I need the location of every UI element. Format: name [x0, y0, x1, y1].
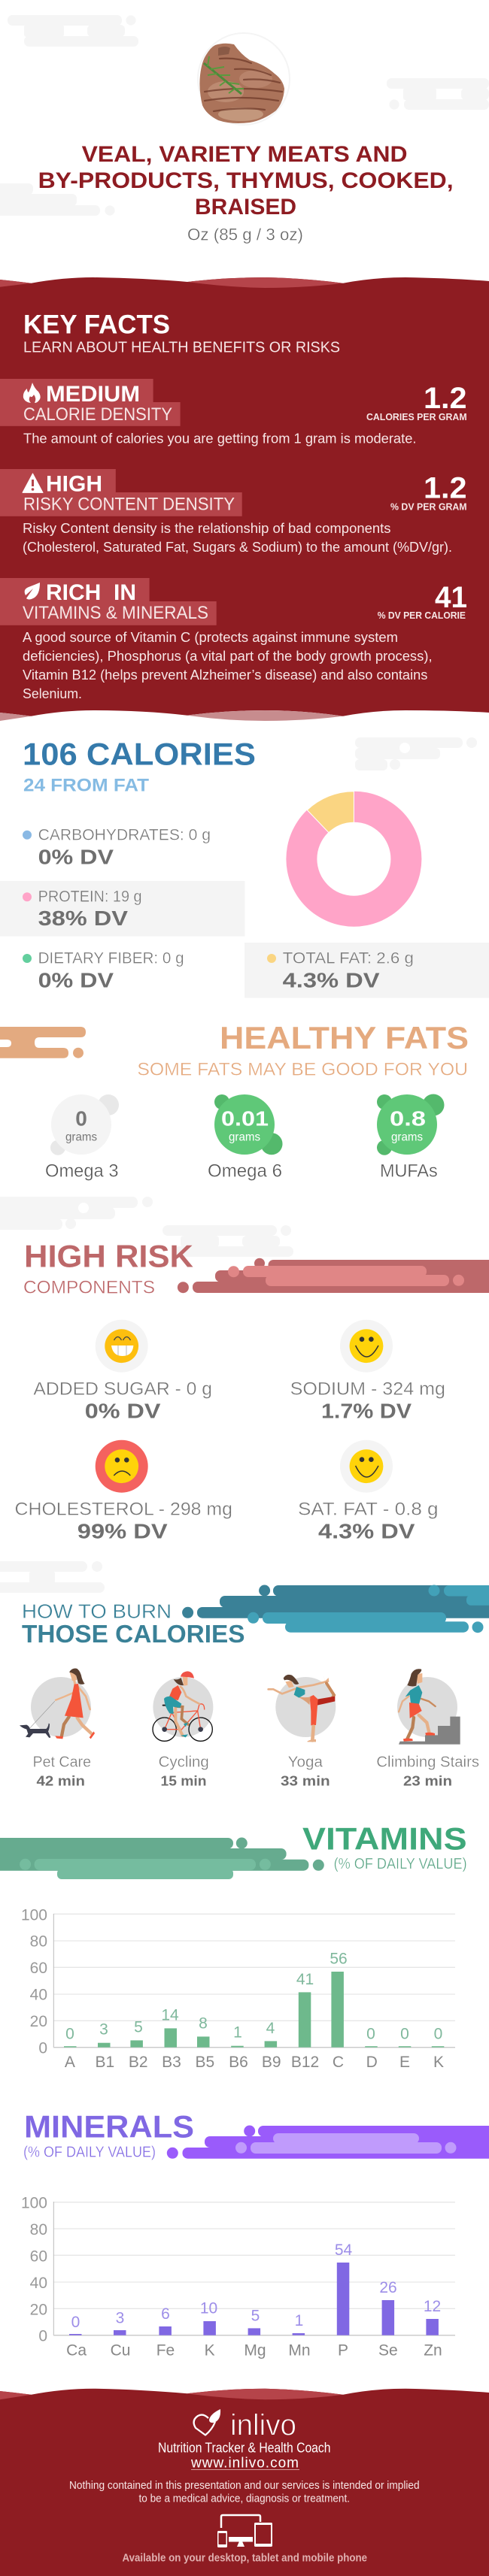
donut chart — [286, 792, 421, 927]
disclaimer: to be a medical advice, diagnosis or treatment. — [138, 2493, 350, 2505]
fact: rich in vitamins and minerals: Vitamin B12 (helps prevent Alzheimer’s disease) and also contains — [23, 667, 427, 683]
fact: risky content density: 1.2 — [424, 472, 467, 505]
fact: calorie density — [0, 379, 467, 446]
stat: omega 3: 0 — [75, 1107, 87, 1131]
bar chart: minerals: 80 — [30, 2221, 47, 2238]
stat: omega 6: 0.01 — [221, 1107, 269, 1131]
heading: high risk: HIGH RISK — [24, 1239, 193, 1274]
website link: www.inlivo.com — [190, 2455, 299, 2471]
bar chart: minerals: Mn — [288, 2342, 311, 2359]
icon: grilled meat photo in circle — [198, 33, 290, 125]
disclaimer — [69, 2480, 420, 2505]
bar chart: vitamins — [21, 1906, 455, 2071]
bar chart: vitamins: B1 — [95, 2054, 114, 2071]
availability note: Available on your desktop, tablet and mobile phone — [122, 2551, 367, 2564]
sub-heading: components: COMPONENTS — [23, 1278, 155, 1298]
bar chart: vitamins: B2 — [129, 2054, 148, 2071]
heading: key facts: KEY FACTS — [23, 310, 170, 340]
disclaimer: Nothing contained in this presentation and our services is intended or implied — [69, 2480, 420, 2492]
bar chart: vitamins: 0 — [65, 2026, 74, 2043]
bar chart: minerals: Fe — [156, 2342, 175, 2359]
activity labels: Cycling — [159, 1754, 209, 1771]
bar chart: vitamins: 100 — [21, 1906, 47, 1924]
bar chart: minerals: Zn — [424, 2342, 442, 2359]
bar chart: minerals: 12 — [424, 2298, 441, 2315]
risk: sodium — [290, 1320, 445, 1423]
title — [38, 142, 454, 219]
stat: MUFAs — [377, 1094, 444, 1182]
decorative header stripes — [0, 1837, 324, 1879]
decorative header stripes — [182, 1585, 489, 1633]
risk: cholesterol: CHOLESTEROL - 298 mg — [15, 1500, 232, 1520]
title: BY-PRODUCTS, THYMUS, COOKED, — [38, 168, 454, 193]
sub-heading: from fat: 24 FROM FAT — [23, 775, 149, 795]
stat: omega 3: Omega 3 — [45, 1161, 119, 1182]
legend: total fat: TOTAL FAT: 2.6 g — [283, 950, 414, 967]
legend: carbohydrates — [23, 826, 211, 868]
activity labels: Climbing Stairs — [376, 1754, 479, 1771]
bar chart: vitamins: C — [333, 2054, 344, 2071]
logo: inlivo: inlivo — [230, 2408, 296, 2441]
sub-heading: (% OF DAILY VALUE) — [334, 1856, 467, 1872]
bar chart: minerals: K — [205, 2342, 215, 2359]
panel: key facts — [0, 277, 489, 721]
risk: added sugar: 0% DV — [85, 1400, 161, 1423]
fact: risky content density: (Cholesterol, Saturated Fat, Sugars & Sodium) to the amount (%DV/gr). — [23, 540, 452, 555]
fact: calorie density: MEDIUM — [46, 382, 140, 407]
bar chart: vitamins: A — [65, 2054, 75, 2071]
fact: calorie density: CALORIE DENSITY — [23, 404, 172, 425]
serving size subtitle: Oz (85 g / 3 oz) — [187, 225, 303, 244]
title: VEAL, VARIETY MEATS AND — [82, 142, 408, 167]
bar chart: minerals: 60 — [30, 2248, 47, 2266]
heading: vitamins: VITAMINS — [302, 1821, 467, 1857]
bar chart: vitamins: B12 — [291, 2054, 319, 2071]
bar chart: minerals: 6 — [161, 2305, 170, 2323]
activity durations: 15 min — [161, 1774, 206, 1789]
bar chart: minerals: Cu — [111, 2342, 130, 2359]
bar chart: vitamins: 40 — [30, 1986, 47, 2004]
heading: how to burn: HOW TO BURN — [22, 1600, 172, 1622]
bar chart: minerals: 3 — [116, 2310, 124, 2327]
fact: rich in vitamins and minerals: VITAMINS & MINERALS — [23, 603, 208, 623]
bar chart: vitamins: 60 — [30, 1960, 47, 1977]
bar chart: vitamins: K — [433, 2054, 444, 2071]
activity: cycling — [153, 1671, 213, 1741]
bar chart: minerals: Ca — [66, 2342, 87, 2359]
bar chart: vitamins: 80 — [30, 1933, 47, 1951]
fact: risky content density: HIGH — [46, 472, 102, 497]
bar chart: vitamins: E — [399, 2054, 410, 2071]
activity durations: 23 min — [403, 1774, 452, 1789]
sub-heading: SOME FATS MAY BE GOOD FOR YOU — [137, 1060, 468, 1080]
legend: carbohydrates: 0% DV — [38, 845, 114, 868]
bar chart: minerals: 10 — [200, 2300, 217, 2317]
risk: saturated fat: SAT. FAT - 0.8 g — [298, 1500, 438, 1520]
legend: protein: 38% DV — [38, 907, 128, 930]
bar chart: minerals: 0 — [71, 2314, 80, 2331]
stat: MUFAs: MUFAs — [380, 1161, 438, 1182]
fact: risky content density: % DV PER GRAM — [390, 501, 467, 513]
bar chart: minerals: Mg — [244, 2342, 266, 2359]
heading: minerals: MINERALS — [24, 2108, 194, 2144]
heading: healthy fats: HEALTHY FATS — [220, 1020, 469, 1055]
risk: sodium: SODIUM - 324 mg — [290, 1379, 445, 1400]
activity durations: 33 min — [281, 1774, 330, 1789]
fact: calorie density: 1.2 — [424, 382, 467, 415]
activity durations — [36, 1774, 452, 1789]
sub-heading: (% OF DAILY VALUE) — [23, 2144, 156, 2160]
fact: risky content density: Risky Content density is the relationship of bad components — [23, 521, 391, 536]
bar chart: minerals — [21, 2195, 455, 2359]
risk: added sugar: ADDED SUGAR - 0 g — [33, 1379, 212, 1400]
fact: calorie density: CALORIES PER GRAM — [366, 411, 467, 422]
panel: vitamins — [0, 1821, 467, 2071]
bar chart: vitamins: B5 — [196, 2054, 214, 2071]
bar chart: vitamins: 1 — [233, 2024, 242, 2042]
panel: minerals — [21, 2108, 489, 2359]
stat: omega 3: grams — [65, 1131, 97, 1143]
risk: sodium: 1.7% DV — [321, 1400, 412, 1423]
legend: carbohydrates: CARBOHYDRATES: 0 g — [38, 826, 211, 843]
bar chart: vitamins: 41 — [296, 1971, 314, 1988]
logo: inlivo — [194, 2408, 296, 2441]
panel: calories — [0, 736, 489, 998]
activity labels: Yoga — [288, 1754, 323, 1771]
decorative header stripes — [0, 1027, 86, 1058]
bar chart: vitamins: 0 — [400, 2026, 409, 2043]
bar chart: minerals: 1 — [295, 2312, 303, 2329]
fact: rich in vitamins and minerals: A good source of Vitamin C (protects against immune system — [23, 630, 398, 645]
bar chart: vitamins: 0 — [366, 2026, 375, 2043]
stat: omega 6 — [208, 1094, 283, 1182]
fact: rich in vitamins and minerals: 41 — [435, 581, 467, 614]
activity labels: Pet Care — [33, 1754, 91, 1771]
bar chart: minerals: 20 — [30, 2301, 47, 2318]
bar chart: minerals: 26 — [379, 2279, 397, 2296]
tagline: Nutrition Tracker & Health Coach — [158, 2440, 331, 2455]
bar chart: minerals: 5 — [251, 2307, 260, 2324]
fact: rich in vitamins and minerals: Selenium. — [23, 686, 82, 701]
legend: protein — [0, 881, 245, 937]
panel: how to burn those calories — [20, 1585, 489, 1789]
panel: high risk components — [15, 1239, 489, 1543]
bar chart: minerals: 100 — [21, 2195, 47, 2212]
stat: MUFAs: 0.8 — [390, 1107, 426, 1131]
risk: added sugar — [33, 1320, 212, 1423]
fact: rich in vitamins and minerals — [0, 578, 467, 701]
stat: omega 6: Omega 6 — [208, 1161, 282, 1182]
title: BRAISED — [195, 195, 296, 219]
heading: calories: 106 CALORIES — [23, 736, 256, 771]
fact: rich in vitamins and minerals: % DV PER CALORIE — [378, 610, 466, 621]
legend: total fat — [244, 943, 489, 998]
icon: flame — [23, 383, 41, 403]
decorative header stripes — [178, 1258, 489, 1293]
activity: pet care — [20, 1669, 95, 1739]
risk: saturated fat: 4.3% DV — [318, 1520, 415, 1543]
bar chart: minerals: Se — [378, 2342, 398, 2359]
bar chart: minerals: 40 — [30, 2275, 47, 2292]
stat: omega 6: grams — [229, 1131, 260, 1143]
legend: dietary fiber — [23, 950, 184, 991]
bar chart: vitamins: 3 — [99, 2021, 108, 2039]
activity durations: 42 min — [36, 1774, 85, 1789]
bar chart: vitamins: 14 — [161, 2006, 179, 2024]
panel: footer — [0, 2389, 489, 2576]
bar chart: vitamins: B9 — [262, 2054, 281, 2071]
bar chart: vitamins: 4 — [266, 2020, 275, 2037]
bar chart: minerals: 54 — [335, 2242, 352, 2259]
bar chart: vitamins: B3 — [162, 2054, 181, 2071]
bar chart: vitamins: D — [366, 2054, 378, 2071]
sub-heading: LEARN ABOUT HEALTH BENEFITS OR RISKS — [23, 340, 340, 356]
icon: desktop, tablet and phone — [217, 2515, 272, 2547]
bar chart: vitamins: 5 — [134, 2018, 143, 2036]
bar chart: vitamins: 56 — [330, 1951, 348, 1968]
stat: omega 3 — [45, 1094, 119, 1182]
bar chart: minerals: P — [338, 2342, 348, 2359]
fact: rich in vitamins and minerals: deficiencies), Phosphorus (a vital part of the body growth process), — [23, 649, 433, 664]
risk: cholesterol — [15, 1440, 232, 1543]
panel: healthy fats — [0, 1020, 469, 1182]
risk: cholesterol: 99% DV — [77, 1520, 168, 1543]
bar chart: vitamins: B6 — [229, 2054, 248, 2071]
risk: saturated fat — [298, 1440, 438, 1543]
fact: rich in vitamins and minerals: RICH IN — [46, 580, 136, 605]
legend: protein: PROTEIN: 19 g — [38, 888, 142, 905]
decorative header stripes — [167, 2126, 489, 2159]
legend: total fat: 4.3% DV — [283, 968, 380, 991]
legend: dietary fiber: 0% DV — [38, 968, 114, 991]
fact: risky content density: RISKY CONTENT DENSITY — [23, 495, 235, 515]
bar chart: vitamins: 0 — [434, 2026, 442, 2043]
activity labels — [33, 1754, 479, 1771]
bar chart: vitamins: 20 — [30, 2013, 47, 2030]
bar chart: vitamins: 8 — [199, 2014, 208, 2032]
bar chart: minerals: 0 — [38, 2328, 47, 2345]
bar chart: vitamins: 0 — [38, 2039, 47, 2057]
activity: yoga — [269, 1675, 336, 1742]
icon: leaf — [25, 583, 40, 600]
heading: those calories: THOSE CALORIES — [22, 1620, 245, 1648]
icon: warning triangle — [23, 474, 43, 492]
fact: calorie density: The amount of calories you are getting from 1 gram is moderate. — [23, 431, 417, 446]
legend: dietary fiber: DIETARY FIBER: 0 g — [38, 950, 184, 967]
fact: risky content density — [0, 469, 467, 555]
stat: MUFAs: grams — [391, 1131, 423, 1143]
activity: climbing stairs — [397, 1669, 460, 1745]
